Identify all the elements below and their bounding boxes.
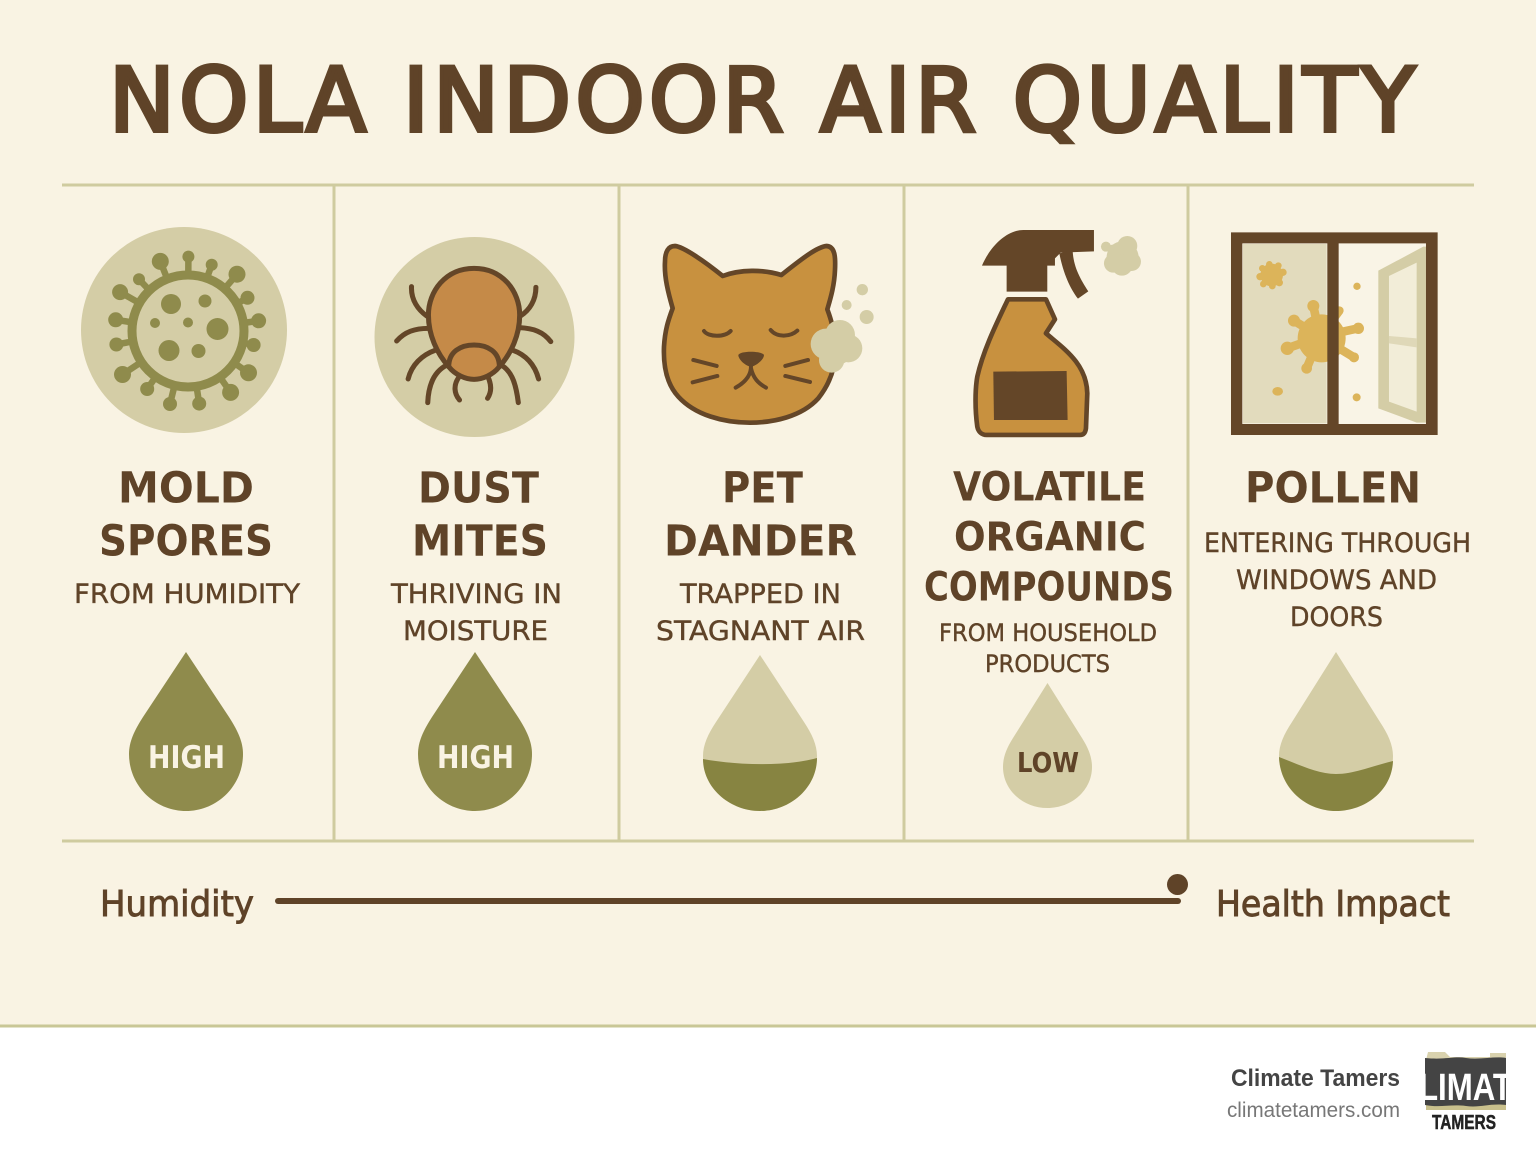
text: entering through windows and doors xyxy=(1204,528,1471,633)
text: entering through windows and doors: WINDOWS AND xyxy=(1236,565,1437,596)
text: trapped in stagnant air xyxy=(656,579,865,647)
heading: mold spores xyxy=(99,464,273,566)
drop: high xyxy=(129,652,243,811)
drop: low: LOW xyxy=(1017,746,1079,779)
heading: dust mites: MITES xyxy=(412,516,548,566)
heading: pet dander: PET xyxy=(722,464,804,514)
icon: cat with dander xyxy=(664,246,874,423)
text: from humidity: FROM HUMIDITY xyxy=(74,579,301,610)
heading: volatile organic compounds: VOLATILE xyxy=(953,464,1146,510)
label: humidity: Humidity xyxy=(100,884,254,925)
text: from household products: FROM HOUSEHOLD xyxy=(939,619,1157,647)
icon: mold spore xyxy=(81,227,287,433)
panel: pollen xyxy=(1204,232,1471,811)
heading: volatile organic compounds: COMPOUNDS xyxy=(924,564,1174,610)
heading: dust mites xyxy=(412,464,548,566)
drop: high: HIGH xyxy=(437,740,514,776)
drop: high: HIGH xyxy=(148,740,225,776)
text: from household products: PRODUCTS xyxy=(985,650,1110,678)
drop: high xyxy=(418,652,532,811)
text: thriving in moisture: MOISTURE xyxy=(403,616,548,647)
icon: spray bottle xyxy=(976,230,1141,435)
footer: logo: LIMAT xyxy=(1419,1067,1512,1109)
text: thriving in moisture: THRIVING IN xyxy=(390,579,562,610)
footer: logo xyxy=(1425,1052,1506,1130)
heading: pet dander xyxy=(664,464,857,566)
title: NOLA INDOOR AIR QUALITY xyxy=(109,49,1415,152)
text: thriving in moisture xyxy=(390,579,562,647)
heading: mold spores: SPORES xyxy=(99,516,273,566)
heading: volatile organic compounds: ORGANIC xyxy=(954,514,1146,560)
heading: volatile organic compounds xyxy=(924,464,1174,610)
footer divider xyxy=(0,1024,1536,1028)
heading: pet dander: DANDER xyxy=(664,516,857,566)
drop: partly filled xyxy=(703,655,817,811)
text: trapped in stagnant air: STAGNANT AIR xyxy=(656,616,865,647)
drop: partly filled xyxy=(1279,652,1393,811)
arrow: humidity to health impact scale xyxy=(278,874,1188,901)
text: entering through windows and doors: DOORS xyxy=(1290,602,1383,633)
panel: dust mites xyxy=(374,237,574,811)
panel: pet dander xyxy=(656,246,874,811)
icon: dust mite xyxy=(374,237,574,437)
text: trapped in stagnant air: TRAPPED IN xyxy=(679,579,841,610)
heading: dust mites: DUST xyxy=(418,464,540,514)
text: entering through windows and doors: ENTERING THROUGH xyxy=(1204,528,1471,559)
label: health impact: Health Impact xyxy=(1216,884,1450,925)
panel: volatile organic compounds xyxy=(924,230,1174,808)
panel: mold spores xyxy=(74,227,301,811)
footer: brand text: Climate Tamers xyxy=(1231,1065,1400,1092)
drop: low xyxy=(1003,683,1092,808)
footer: logo: TAMERS xyxy=(1432,1112,1496,1134)
heading: pollen: POLLEN xyxy=(1245,464,1421,514)
text: from household products xyxy=(939,619,1157,678)
heading: mold spores: MOLD xyxy=(118,464,254,514)
footer: brand text xyxy=(1227,1065,1400,1122)
icon: window with pollen xyxy=(1231,232,1438,435)
footer: brand text: climatetamers.com xyxy=(1227,1099,1400,1122)
